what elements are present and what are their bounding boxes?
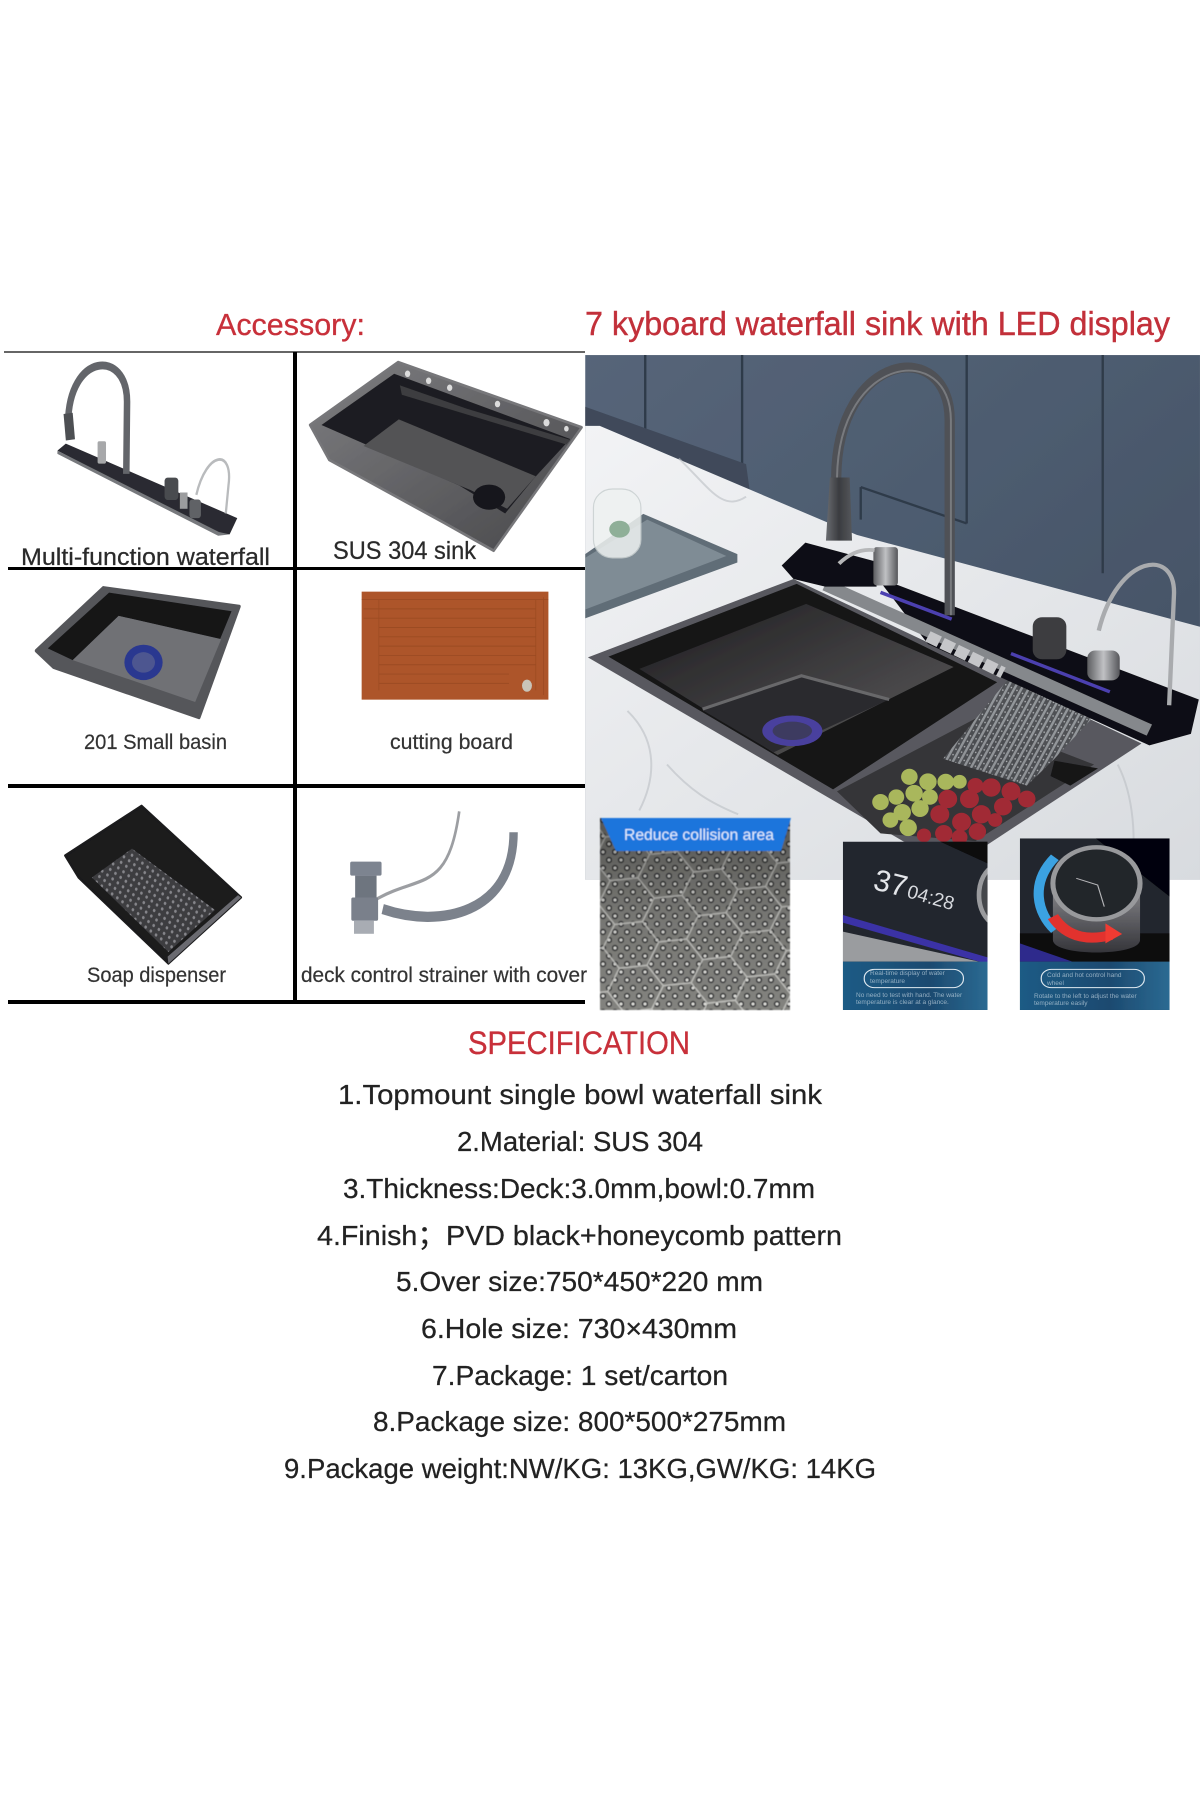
label: Soap dispenser (87, 964, 226, 987)
fruit (872, 769, 1036, 845)
sink body (588, 579, 1141, 853)
heading: product title: 7 kyboard waterfall sink with LED display (585, 305, 1170, 342)
banner: reduce collision area: Reduce collision area (624, 827, 774, 844)
label: cutting board (390, 731, 513, 754)
label: deck control strainer with cover (301, 964, 587, 987)
heading: Accessory: Accessory: (216, 307, 365, 342)
specification list: 2.Material: SUS 304 (457, 1126, 703, 1157)
caption: wheel (1046, 980, 1065, 987)
caption (856, 970, 963, 1006)
caption: Real-time display of water (870, 970, 946, 977)
specification list: 4.Finish；PVD black+honeycomb pattern (317, 1220, 842, 1251)
icon: colander tray (65, 806, 241, 964)
specification list: 3.Thickness:Deck:3.0mm,bowl:0.7mm (343, 1173, 815, 1204)
panel: deck control strainer (301, 811, 587, 987)
specification list (284, 1079, 876, 1484)
label: 201 Small basin (84, 731, 227, 754)
caption: Cold and hot control hand (1047, 972, 1122, 979)
knobs (1033, 617, 1120, 680)
specification list: 9.Package weight:NW/KG: 13KG,GW/KG: 14KG (284, 1453, 876, 1484)
panel: cutting board (362, 592, 548, 754)
accessory grid lines (4, 351, 585, 1004)
inset: honeycomb texture (600, 818, 791, 1010)
main product photo: waterfall sink (585, 355, 1200, 880)
marble countertop (585, 426, 1200, 880)
specification list: 6.Hole size: 730×430mm (421, 1313, 737, 1344)
caption (1034, 972, 1137, 1007)
panel: soap dispenser (65, 806, 241, 987)
specification list: 5.Over size:750*450*220 mm (396, 1266, 763, 1297)
cutting tray and glass (585, 489, 737, 618)
caption: No need to test with hand. The water (856, 992, 963, 999)
filtered water tap (1099, 565, 1174, 705)
caption: Rotate to the left to adjust the water (1034, 993, 1137, 1000)
waterfall spray (943, 676, 1099, 786)
panel: 201 small basin (36, 588, 239, 754)
icon: faucet with control strip (57, 365, 237, 536)
label: SUS 304 sink (333, 537, 476, 565)
heading: specification: SPECIFICATION (468, 1025, 690, 1061)
control strip (782, 543, 1199, 745)
time reading: 04:28 (905, 882, 957, 915)
inset: LED temperature display (842, 842, 988, 1010)
icon: small basin (36, 588, 239, 717)
marble veins (627, 458, 1134, 880)
icon: sink bowl (310, 362, 582, 551)
label: Multi-function waterfall (21, 544, 270, 571)
specification list: 8.Package size: 800*500*275mm (373, 1406, 786, 1437)
inset: hot and cold control knob (1020, 838, 1170, 1010)
temperature reading: 37 (870, 864, 911, 904)
soap bottle (839, 547, 898, 585)
icon: strainer and hoses (350, 811, 514, 934)
specification list: 1.Topmount single bowl waterfall sink (338, 1079, 823, 1110)
caption: temperature easily (1034, 1000, 1088, 1007)
banner: reduce collision area (601, 818, 791, 851)
panel: multi-function waterfall (21, 365, 270, 571)
wall cabinets (585, 355, 1200, 880)
icon: wooden board (362, 592, 548, 700)
caption: temperature is clear at a glance. (856, 999, 949, 1006)
main faucet (826, 368, 951, 615)
panel: SUS 304 sink (310, 362, 582, 565)
caption: temperature (870, 978, 905, 985)
specification list: 7.Package: 1 set/carton (432, 1360, 728, 1391)
